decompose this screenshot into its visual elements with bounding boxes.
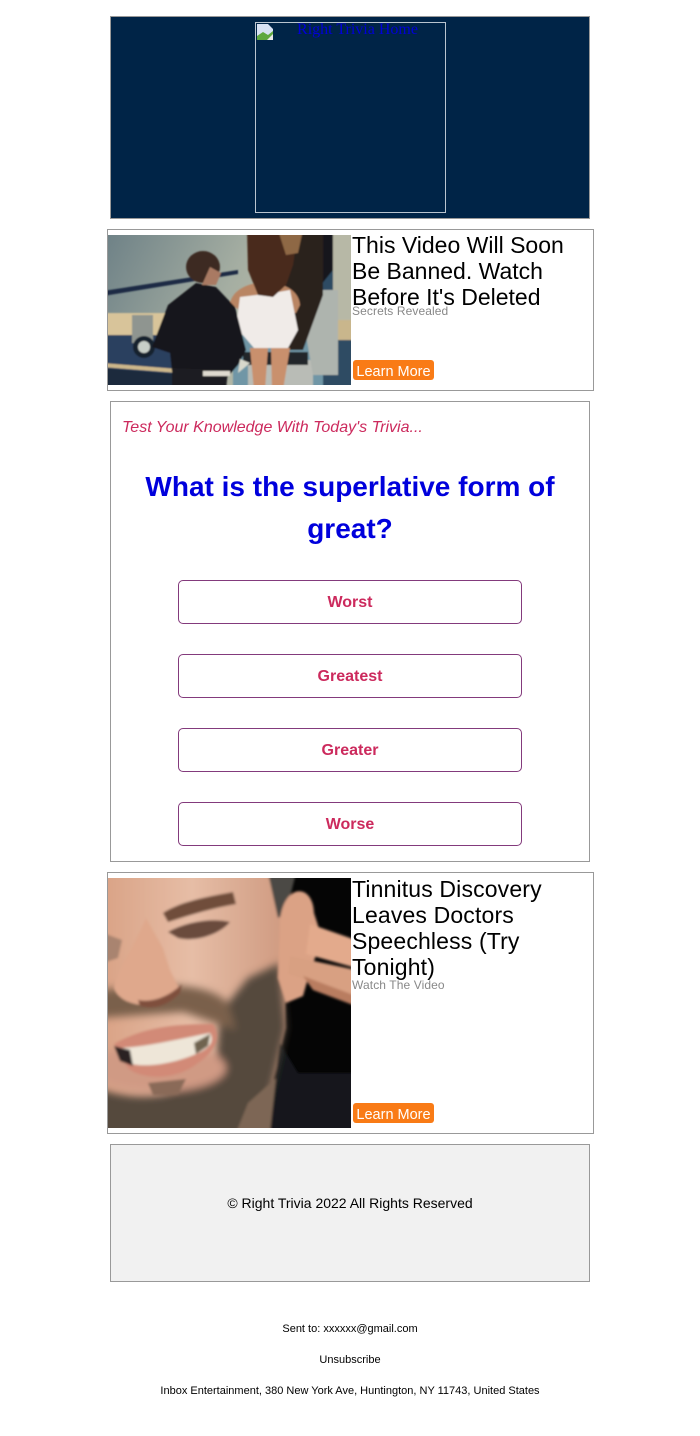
beard: [90, 963, 286, 1138]
ad 1 headline: Before It's Deleted: [352, 284, 540, 310]
ad 2 headline: Tonight): [352, 954, 435, 980]
panel: header banner: [110, 16, 590, 219]
answer: Greater: Greater: [322, 742, 378, 759]
question heading: What is the superlative form of: [145, 471, 555, 502]
ad 2 headline: Leaves Doctors: [352, 902, 514, 928]
trivia intro: Test Your Knowledge With Today's Trivia...: [122, 419, 423, 436]
panel: trivia question: [110, 401, 590, 862]
photo: man in pain holding his ear: [108, 878, 351, 1128]
soul patch: [148, 1079, 186, 1095]
answer: Worse: [178, 802, 522, 846]
man: [152, 283, 246, 390]
ear: [278, 891, 322, 1003]
panel: copyright footer: [110, 1144, 590, 1282]
ad 1 headline: [352, 232, 564, 310]
unsubscribe link: Unsubscribe: [319, 1354, 381, 1366]
ad 2 headline: Speechless (Try: [352, 928, 520, 954]
question heading: great?: [307, 513, 393, 544]
answer: Greatest: [178, 654, 522, 698]
ad 1 button: Learn More: [356, 364, 431, 380]
photo: couple boarding a private jet: [108, 235, 351, 385]
panel: second advertisement: [107, 872, 594, 1134]
postal address: Inbox Entertainment, 380 New York Ave, Huntington, NY 11743, United States: [160, 1385, 540, 1397]
ad 2 headline: Tinnitus Discovery: [352, 876, 542, 902]
ad 1 headline: Be Banned. Watch: [352, 258, 543, 284]
fingers: [306, 924, 356, 968]
lips: [114, 1024, 217, 1077]
question heading: [145, 471, 555, 544]
shirt: [268, 1043, 356, 1133]
hair: [268, 873, 296, 918]
ad 1 subtext: Secrets Revealed: [352, 304, 448, 318]
ad 2 button: Learn More: [356, 1107, 431, 1123]
answer: Worst: Worst: [327, 594, 373, 611]
answer: Greatest: Greatest: [318, 668, 382, 685]
ad 2 headline: [352, 876, 542, 980]
nose: [114, 918, 180, 1005]
panel: first advertisement: [107, 229, 594, 391]
woman: [230, 282, 300, 313]
copyright text: © Right Trivia 2022 All Rights Reserved: [227, 1195, 473, 1211]
icon: broken image: [257, 24, 273, 40]
answer: Worse: Worse: [326, 816, 374, 833]
ad 2 subtext: Watch The Video: [352, 978, 445, 992]
answer: Greater: [178, 728, 522, 772]
broken logo image frame: [255, 22, 446, 213]
answer: Worst: [178, 580, 522, 624]
ad 1 headline: This Video Will Soon: [352, 232, 564, 258]
sent-to line: Sent to: xxxxxx@gmail.com: [282, 1323, 418, 1335]
brow and eye: [163, 892, 236, 922]
teeth: [116, 1033, 212, 1065]
logo alt text: Right Trivia Home: [297, 21, 418, 38]
